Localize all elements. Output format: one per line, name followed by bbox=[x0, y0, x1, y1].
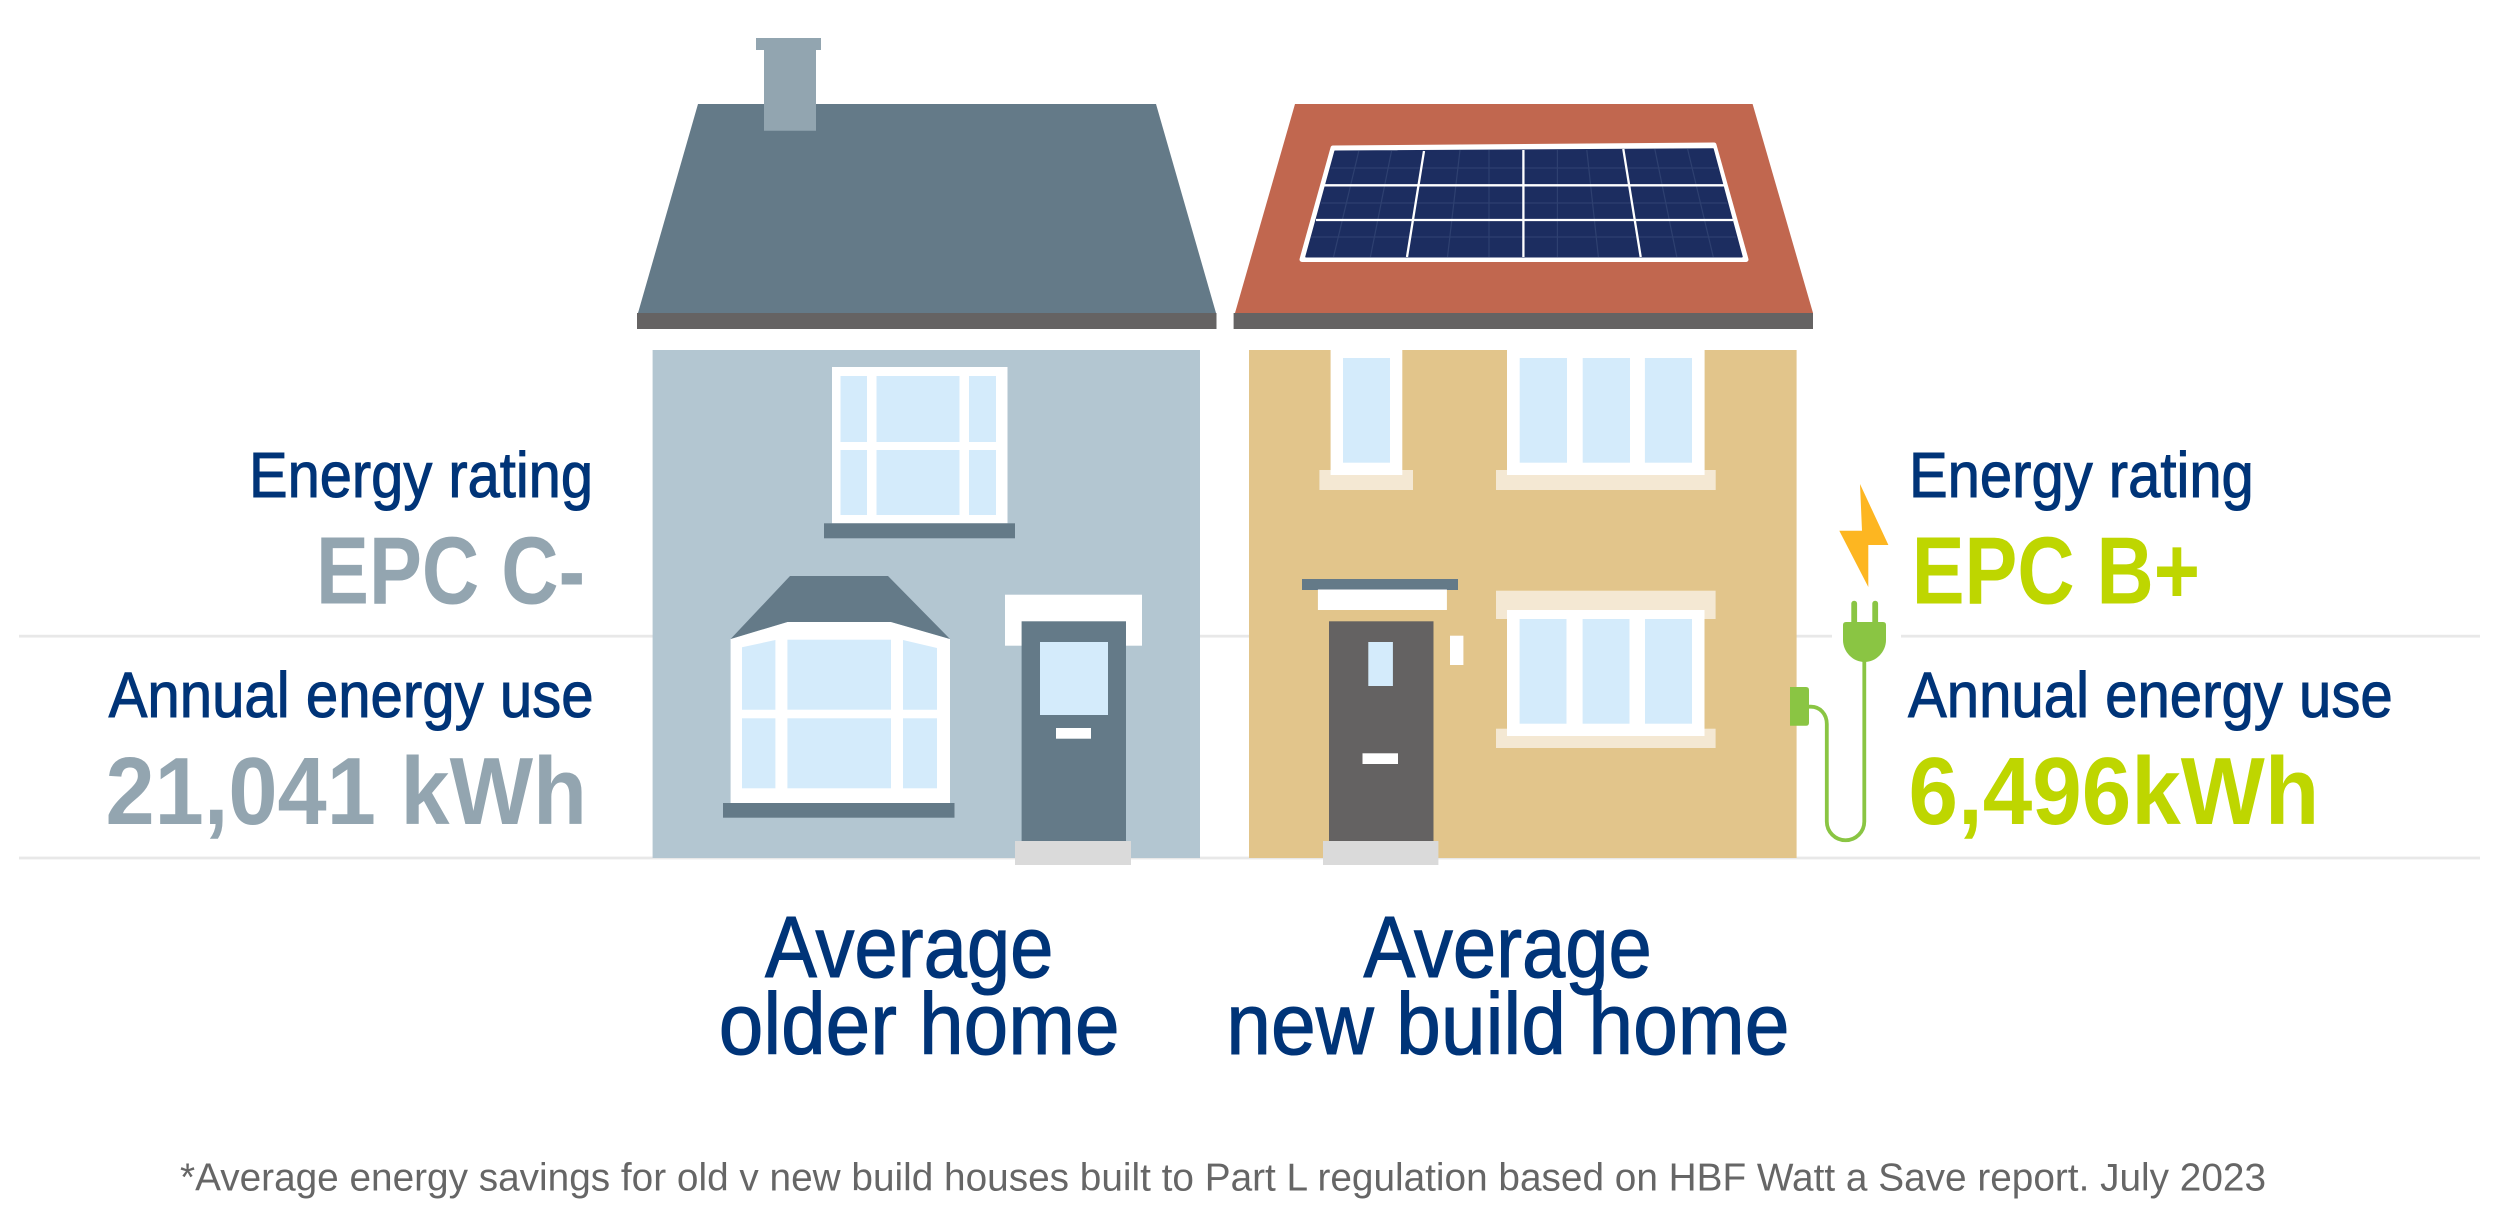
roof fascia bbox=[1234, 313, 1813, 329]
upper window bbox=[824, 367, 1015, 538]
caption: new build home: Average bbox=[1364, 899, 1652, 996]
front door bbox=[1005, 595, 1142, 865]
wall bbox=[653, 350, 1200, 858]
icon: lightning bolt bbox=[1839, 484, 1888, 587]
solar panel bbox=[1302, 145, 1746, 260]
panel: new build home illustration bbox=[1234, 104, 1888, 865]
caption: new build home bbox=[1226, 899, 1790, 1073]
right annual energy use label: Annual energy use bbox=[1908, 659, 2393, 731]
caption: older home bbox=[719, 899, 1120, 1073]
right EPC value: EPC B+ bbox=[1912, 517, 2200, 624]
roof bbox=[1235, 104, 1813, 313]
icon: EV charger plug and cable bbox=[1790, 601, 1886, 840]
upper right window bbox=[1496, 350, 1716, 490]
roof fascia bbox=[637, 313, 1216, 329]
right annual energy use value: 6,496kWh bbox=[1908, 738, 2319, 845]
caption: older home: older home bbox=[719, 976, 1120, 1073]
wall bbox=[1249, 350, 1797, 858]
panel: older home illustration bbox=[637, 38, 1216, 865]
caption: older home: Average bbox=[765, 899, 1053, 996]
left annual energy use label: Annual energy use bbox=[109, 659, 594, 731]
right energy rating label: Energy rating bbox=[1909, 439, 2254, 511]
lower window bbox=[1496, 591, 1716, 748]
footnote: *Average energy savings for old v new build houses built to Part L regulation based on HBF Watt a Save report. July 2023 bbox=[180, 1157, 2266, 1200]
icon: chimney bbox=[756, 38, 821, 131]
bay window bbox=[723, 576, 954, 818]
roof bbox=[638, 104, 1216, 313]
upper left window bbox=[1319, 350, 1413, 490]
left annual energy use value: 21,041 kWh bbox=[106, 738, 587, 845]
front door bbox=[1302, 579, 1463, 865]
left EPC value: EPC C- bbox=[316, 517, 585, 624]
caption: new build home: new build home bbox=[1226, 976, 1790, 1073]
left energy rating label: Energy rating bbox=[249, 439, 593, 511]
